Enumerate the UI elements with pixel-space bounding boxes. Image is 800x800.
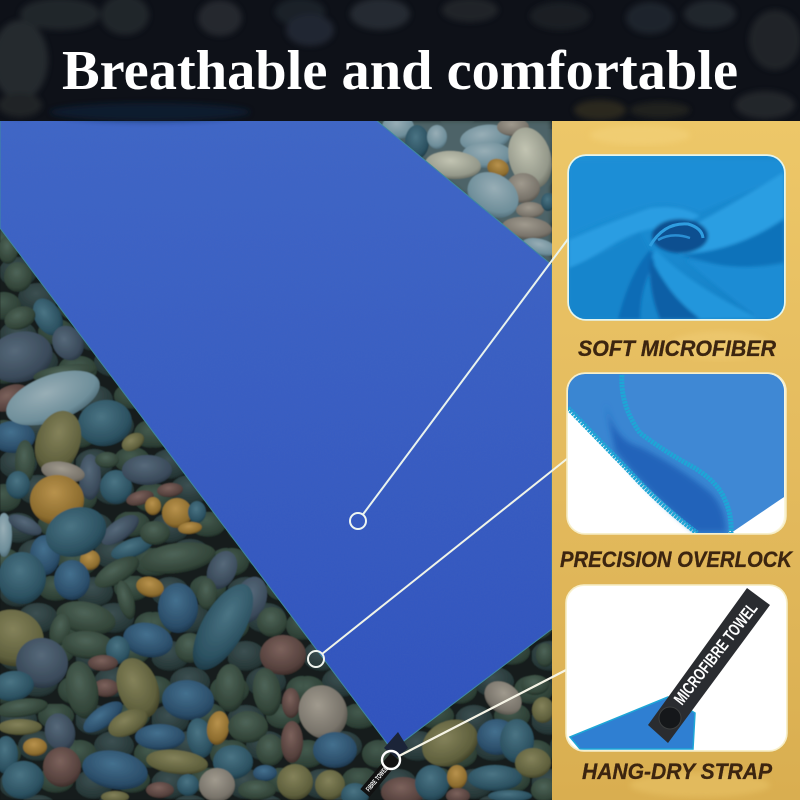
panel: hang-dry strap photo (566, 585, 787, 751)
label: hang-dry strap: HANG-DRY STRAP (582, 759, 772, 784)
gold side panel (552, 121, 800, 800)
towel corner (570, 697, 695, 749)
panel: soft microfiber photo (568, 155, 785, 320)
title: Breathable and comfortable (62, 40, 738, 102)
callout leader line 1 (350, 239, 568, 529)
label: soft microfiber: SOFT MICROFIBER (578, 336, 776, 361)
towel strap tag: FIBRE TOWEL (365, 765, 390, 793)
header band with title (0, 0, 800, 121)
strap (648, 588, 770, 743)
panel: hang-dry strap photo: MICROFIBRE TOWEL (670, 599, 761, 708)
callout leader line 2 (308, 458, 568, 667)
panel: precision overlock photo (567, 373, 786, 534)
callout leader line 3 (382, 669, 568, 769)
towel: blue microfiber (0, 120, 552, 758)
